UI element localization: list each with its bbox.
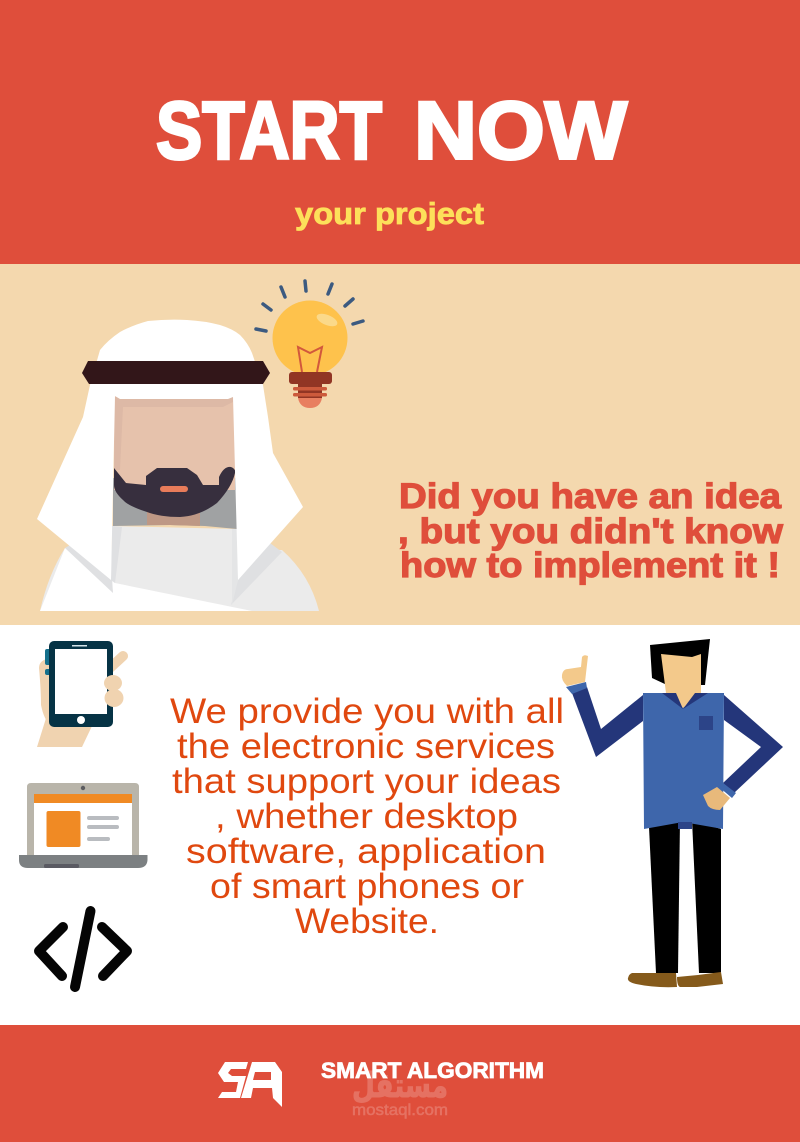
watermark bbox=[352, 1066, 448, 1119]
text block: services: the electronic services bbox=[177, 727, 555, 766]
icon: smartphone in hand bbox=[37, 641, 124, 747]
icon: light bulb bbox=[256, 281, 363, 408]
text block: question: , but you didn't know bbox=[398, 512, 784, 551]
text block: services: that support your ideas bbox=[172, 762, 561, 801]
text block: services: of smart phones or bbox=[210, 867, 524, 906]
text block: services bbox=[170, 692, 564, 941]
panel: idea bbox=[0, 264, 800, 625]
title: START bbox=[156, 86, 382, 176]
text block: services: We provide you with all bbox=[170, 692, 564, 731]
text block: question bbox=[398, 477, 784, 585]
panel: footer bbox=[0, 1025, 800, 1142]
watermark: مستقل bbox=[352, 1066, 448, 1106]
icon: laptop bbox=[19, 783, 148, 868]
title bbox=[156, 86, 628, 176]
panel: services bbox=[0, 625, 800, 1025]
text block: question: Did you have an idea bbox=[399, 477, 782, 516]
text block: services: software, application bbox=[186, 832, 546, 871]
illustration: arab man bbox=[37, 320, 319, 611]
panel: header bbox=[0, 0, 800, 264]
watermark: mostaql.com bbox=[352, 1102, 448, 1119]
icon: code brackets bbox=[39, 911, 127, 987]
brand name: SMART ALGORITHM bbox=[321, 1058, 544, 1083]
text block: question: how to implement it ! bbox=[400, 546, 780, 585]
text block: services: , whether desktop bbox=[215, 797, 518, 836]
text block: services: Website. bbox=[295, 902, 439, 941]
illustration: man thumbs up bbox=[562, 639, 783, 987]
logo: SA bbox=[218, 1062, 282, 1107]
title: NOW bbox=[414, 86, 628, 176]
subtitle: your project bbox=[295, 196, 484, 231]
